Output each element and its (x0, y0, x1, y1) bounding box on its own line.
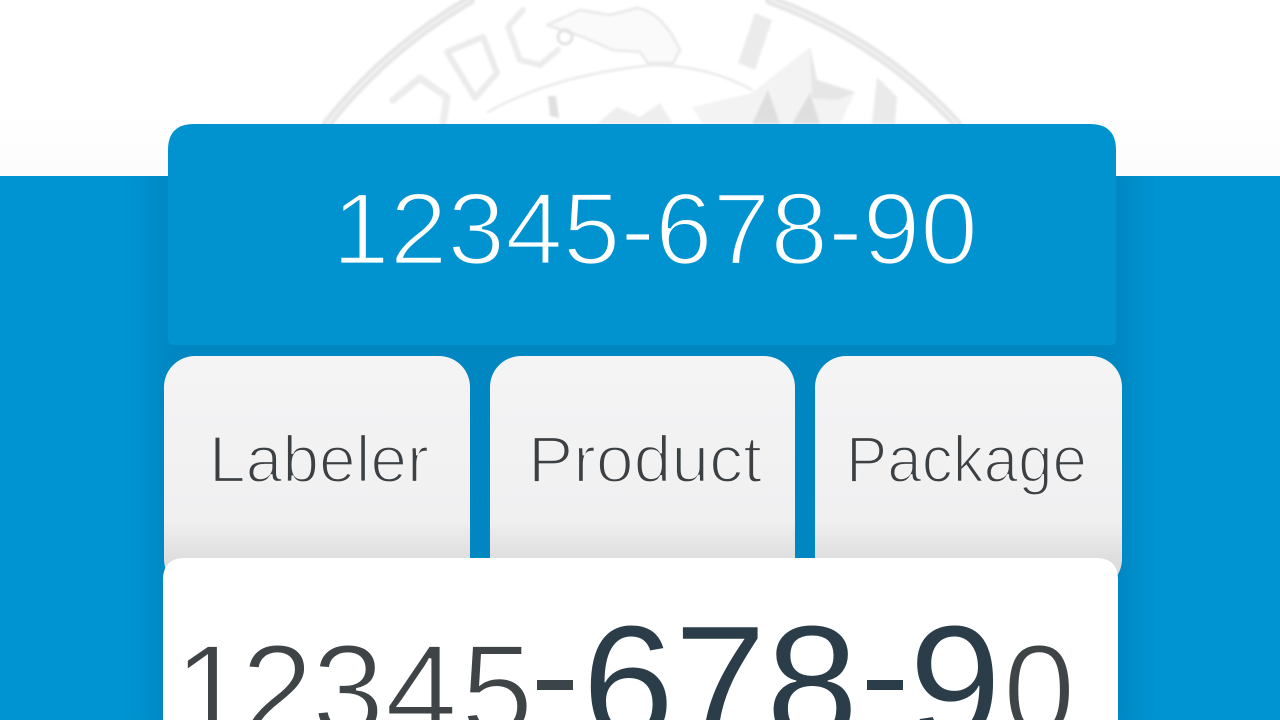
header number: 12345-678-90 (332, 172, 978, 286)
seal watermark (327, 0, 957, 124)
blue band (0, 176, 1280, 720)
panel: NDC number header (168, 124, 1116, 345)
soft shade above blue band (0, 110, 1280, 176)
product text: Product (528, 422, 762, 496)
second hyphen (867, 680, 903, 690)
band shadow around panels (150, 150, 1135, 720)
card: Labeler (164, 356, 470, 590)
package text: Package (846, 422, 1087, 496)
panel: segmented number (163, 558, 1118, 720)
first hyphen (537, 680, 573, 690)
card: Package (815, 356, 1122, 590)
labeler text: Labeler (209, 422, 429, 496)
card: Product (490, 356, 795, 590)
